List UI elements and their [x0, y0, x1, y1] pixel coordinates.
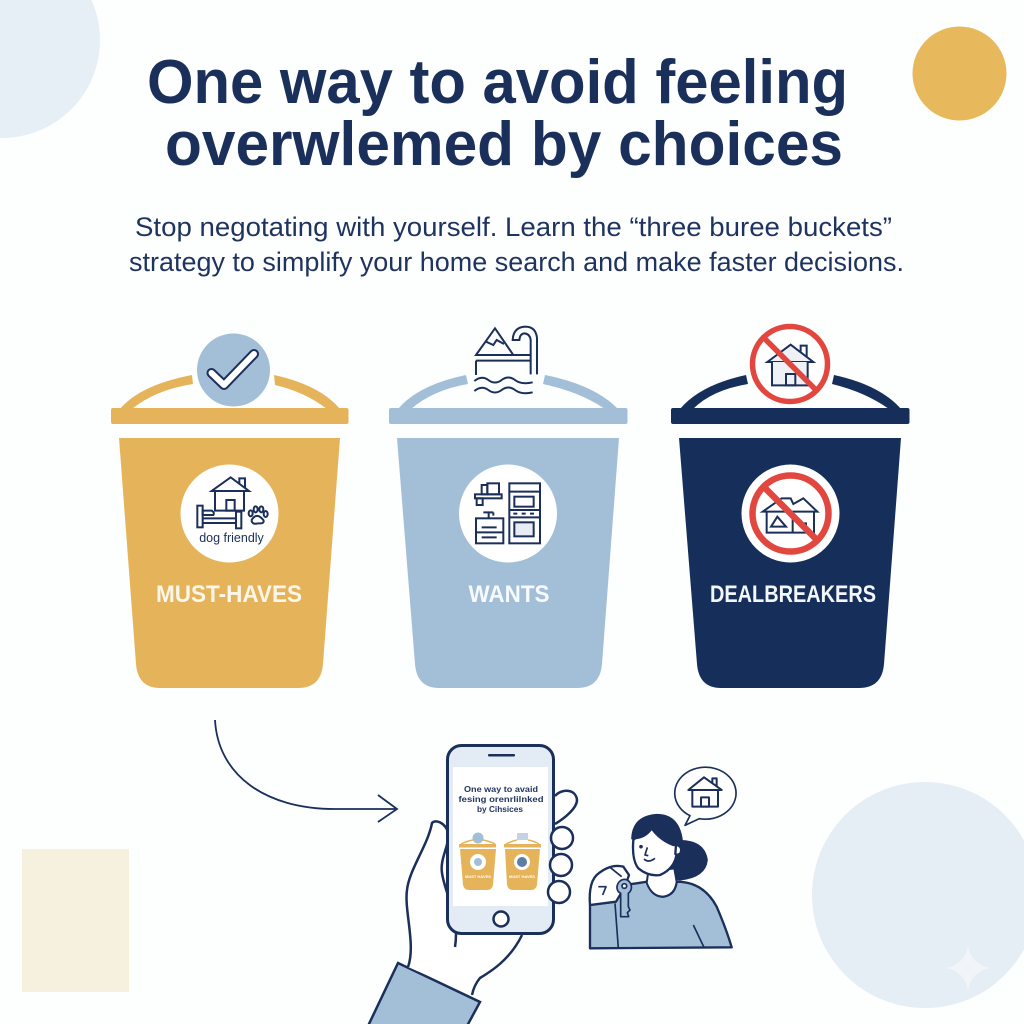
subtitle — [129, 212, 904, 277]
bucket body — [397, 438, 619, 688]
phone mini bucket left: MUST HAVES — [465, 874, 491, 879]
phone body — [448, 746, 554, 934]
icon: no house badge — [752, 326, 828, 402]
bucket body — [679, 438, 901, 688]
icon: pool and mountain — [474, 327, 537, 393]
phone home button — [494, 912, 508, 926]
decorative sparkle — [945, 945, 991, 991]
phone mini bucket left — [459, 832, 496, 890]
key hole — [622, 884, 627, 888]
hand outline — [407, 821, 522, 995]
bucket lid handle — [680, 375, 901, 409]
phone speaker — [488, 754, 515, 756]
decorative circle: top right gold — [912, 26, 1006, 120]
decorative circle: top left — [0, 0, 100, 138]
title: overwlemed by choices — [165, 110, 843, 179]
decorative circle: bottom right — [812, 782, 1024, 1008]
phone mini bucket right — [504, 833, 541, 890]
fingers — [548, 791, 577, 903]
hand finger lines — [598, 867, 622, 895]
icon: no damaged house — [742, 464, 840, 562]
panel: wants bucket — [389, 327, 628, 688]
title: One way to avoid feeling — [147, 48, 848, 117]
icon: house, bed and paw — [180, 464, 278, 562]
arrow: curved to phone — [215, 720, 397, 822]
panel: must-haves bucket — [111, 334, 348, 688]
illustration: woman holding key — [590, 767, 736, 948]
bucket lid handle — [120, 375, 340, 409]
icon: check badge — [197, 334, 270, 406]
sleeve — [368, 963, 480, 1024]
bucket lid rim — [671, 408, 910, 424]
subtitle: Stop negotating with yourself. Learn the “three buree buckets” — [135, 212, 892, 242]
phone mini bucket right: MUST HAVES — [509, 874, 535, 879]
phone screen — [453, 767, 548, 906]
bucket lid rim — [111, 408, 348, 424]
speech bubble — [675, 767, 736, 825]
subtitle: strategy to simplify your home search and make faster decisions. — [129, 247, 904, 277]
phone screen text: fesing orenrlilnked — [458, 794, 544, 804]
label: wants: WANTS — [468, 581, 550, 608]
key — [617, 879, 631, 917]
decorative cream rectangle — [22, 849, 129, 992]
hair — [632, 815, 682, 845]
facial features — [640, 846, 655, 861]
ear — [675, 845, 681, 855]
bucket lid handle — [398, 375, 618, 409]
bucket lid rim — [389, 408, 628, 424]
icon: kitchen — [459, 464, 557, 562]
phone screen text: One way to avaid — [464, 784, 538, 794]
phone screen text: by Cihsices — [477, 804, 523, 814]
title — [147, 48, 848, 179]
label: dealbreakers: DEALBREAKERS — [710, 581, 876, 608]
neck — [647, 868, 677, 897]
panel: dealbreakers bucket — [671, 326, 910, 688]
face — [633, 828, 677, 875]
hair bun — [648, 841, 707, 879]
icon: bubble house — [688, 777, 722, 807]
icon: house, bed and paw: dog friendly — [199, 531, 265, 545]
illustration: hand holding phone — [368, 746, 577, 1024]
bucket body — [119, 438, 340, 688]
sleeve crease lines — [615, 903, 704, 948]
torso and sleeve — [590, 882, 732, 948]
hand back — [407, 821, 522, 995]
label: must-haves: MUST-HAVES — [156, 581, 302, 608]
phone screen text — [458, 784, 544, 814]
hand — [590, 866, 629, 905]
